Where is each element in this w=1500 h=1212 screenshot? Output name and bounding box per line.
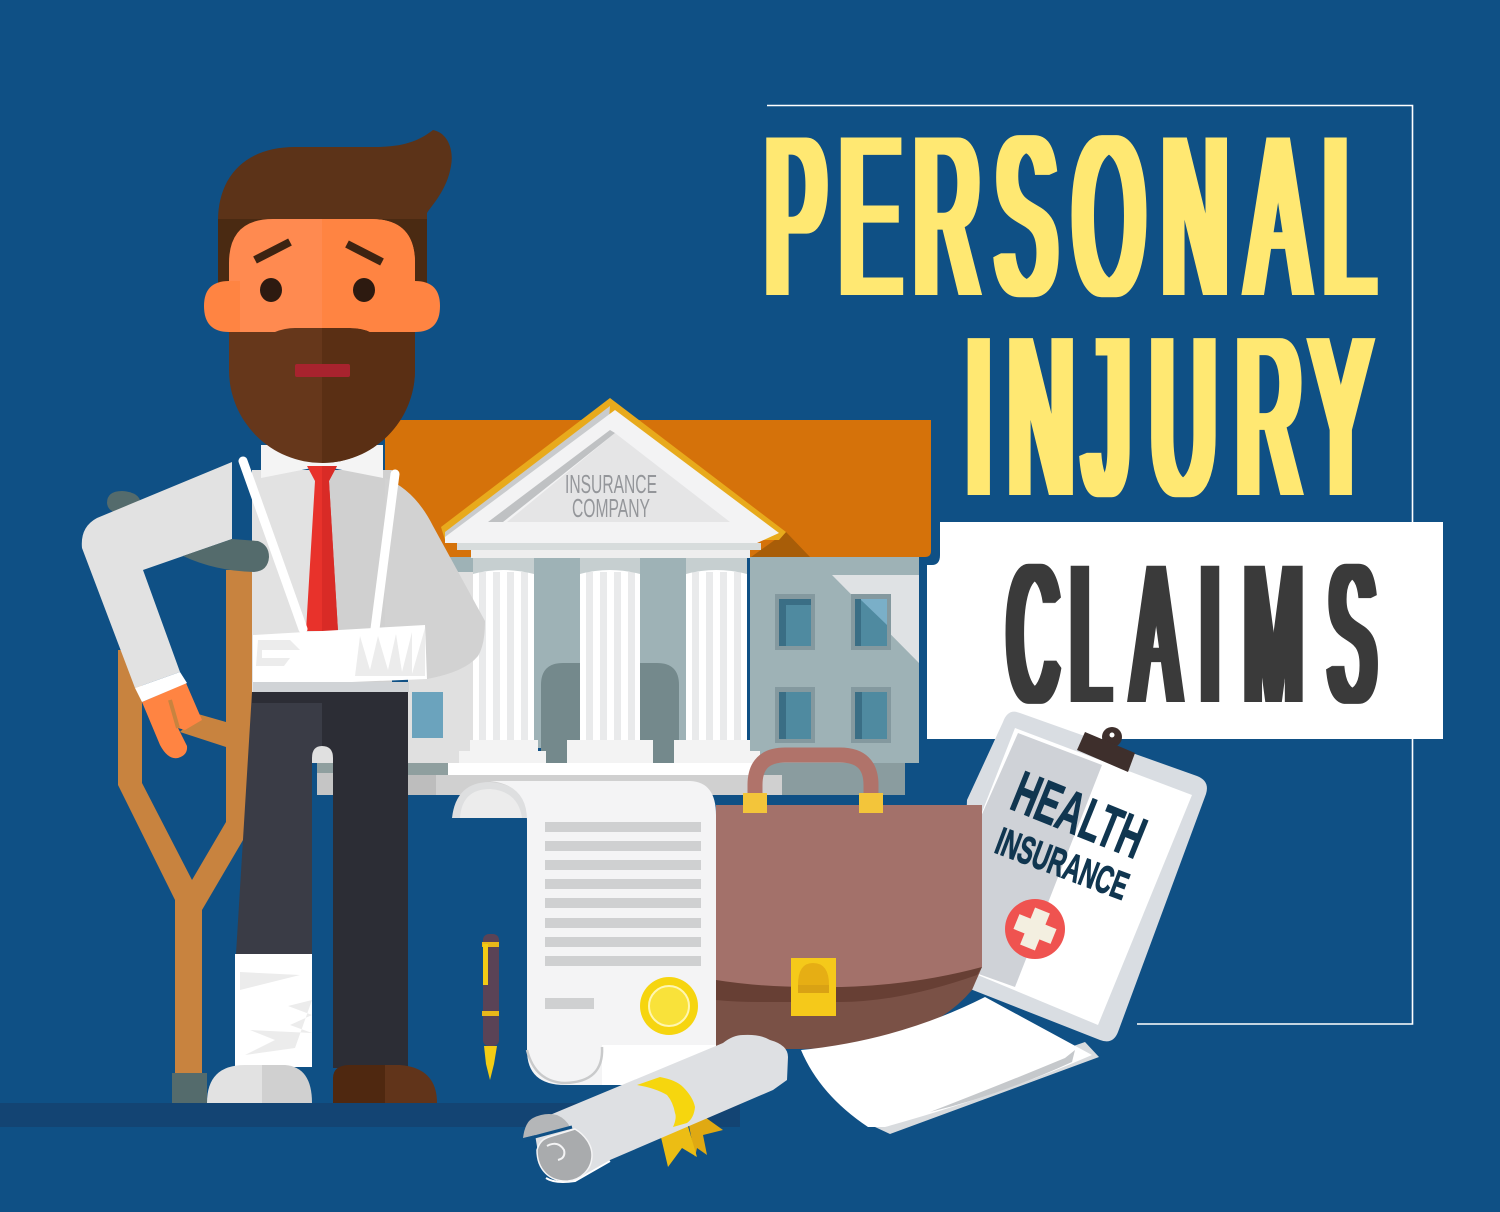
- building sign text: [565, 469, 657, 523]
- briefcase: [716, 755, 982, 1049]
- body: [716, 805, 982, 1049]
- left hand: [142, 683, 202, 758]
- windows: [775, 594, 891, 743]
- man on crutch: [82, 130, 485, 1103]
- doors: [541, 663, 580, 775]
- loose papers: [801, 997, 1099, 1134]
- text lines: [545, 822, 701, 1009]
- tie: [306, 466, 338, 631]
- roll body: [533, 1035, 788, 1181]
- arm sling: [253, 625, 427, 686]
- ribbon band: [637, 1077, 695, 1127]
- ground shadow: [0, 1103, 740, 1127]
- clips: [743, 793, 767, 813]
- pen: [482, 934, 499, 1080]
- title: personal injury: [766, 88, 1374, 544]
- hair: [218, 130, 452, 221]
- rolled diploma: [523, 1035, 788, 1182]
- eyes: [260, 278, 282, 302]
- gap between legs: [312, 746, 333, 795]
- handle: [755, 755, 871, 800]
- steps: [459, 740, 760, 763]
- straps: [243, 461, 395, 629]
- insurance company building: [385, 398, 931, 795]
- roll lip: [523, 1114, 570, 1138]
- right sleeve: [385, 478, 485, 680]
- building sign text: COMPANY: [572, 493, 650, 523]
- clasp: [791, 958, 836, 1016]
- roll end: [537, 1129, 592, 1181]
- health insurance clipboard: [960, 712, 1207, 1041]
- columns: [473, 558, 747, 742]
- eyebrows: [255, 242, 290, 260]
- clipboard paper: [973, 728, 1192, 1025]
- clip: [1077, 727, 1135, 772]
- left arm: [82, 462, 232, 688]
- seal: [640, 977, 698, 1035]
- claims title: CLAIMS: [1008, 524, 1375, 745]
- ears: [204, 281, 240, 332]
- shoe: [333, 1065, 385, 1103]
- beard: [229, 327, 415, 463]
- shirt torso: [252, 470, 322, 692]
- right wing: [750, 557, 919, 763]
- building sign text: INSURANCE: [565, 469, 657, 499]
- mouth: [295, 364, 350, 377]
- left wing: [408, 557, 474, 763]
- document scroll: [452, 781, 716, 1085]
- portico back wall: [534, 558, 686, 748]
- title: personal injury: INJURY: [966, 288, 1370, 544]
- roof: [385, 420, 931, 557]
- clipboard heading: [990, 759, 1155, 909]
- crossbar: [180, 714, 226, 747]
- title: personal injury: PERSONAL: [766, 88, 1374, 344]
- trousers: [236, 692, 408, 1068]
- crutch pad: [183, 539, 269, 572]
- ribbon tails: [688, 1115, 723, 1157]
- bandaged leg: [235, 954, 312, 1067]
- pediment: [441, 398, 786, 540]
- collar: [261, 445, 383, 478]
- crutch: [107, 491, 253, 1103]
- clipboard heading: HEALTH: [1003, 759, 1155, 871]
- face: [229, 219, 415, 332]
- claims banner: [927, 522, 1443, 745]
- clipboard heading: INSURANCE: [990, 820, 1134, 909]
- medical cross badge: [1005, 899, 1065, 959]
